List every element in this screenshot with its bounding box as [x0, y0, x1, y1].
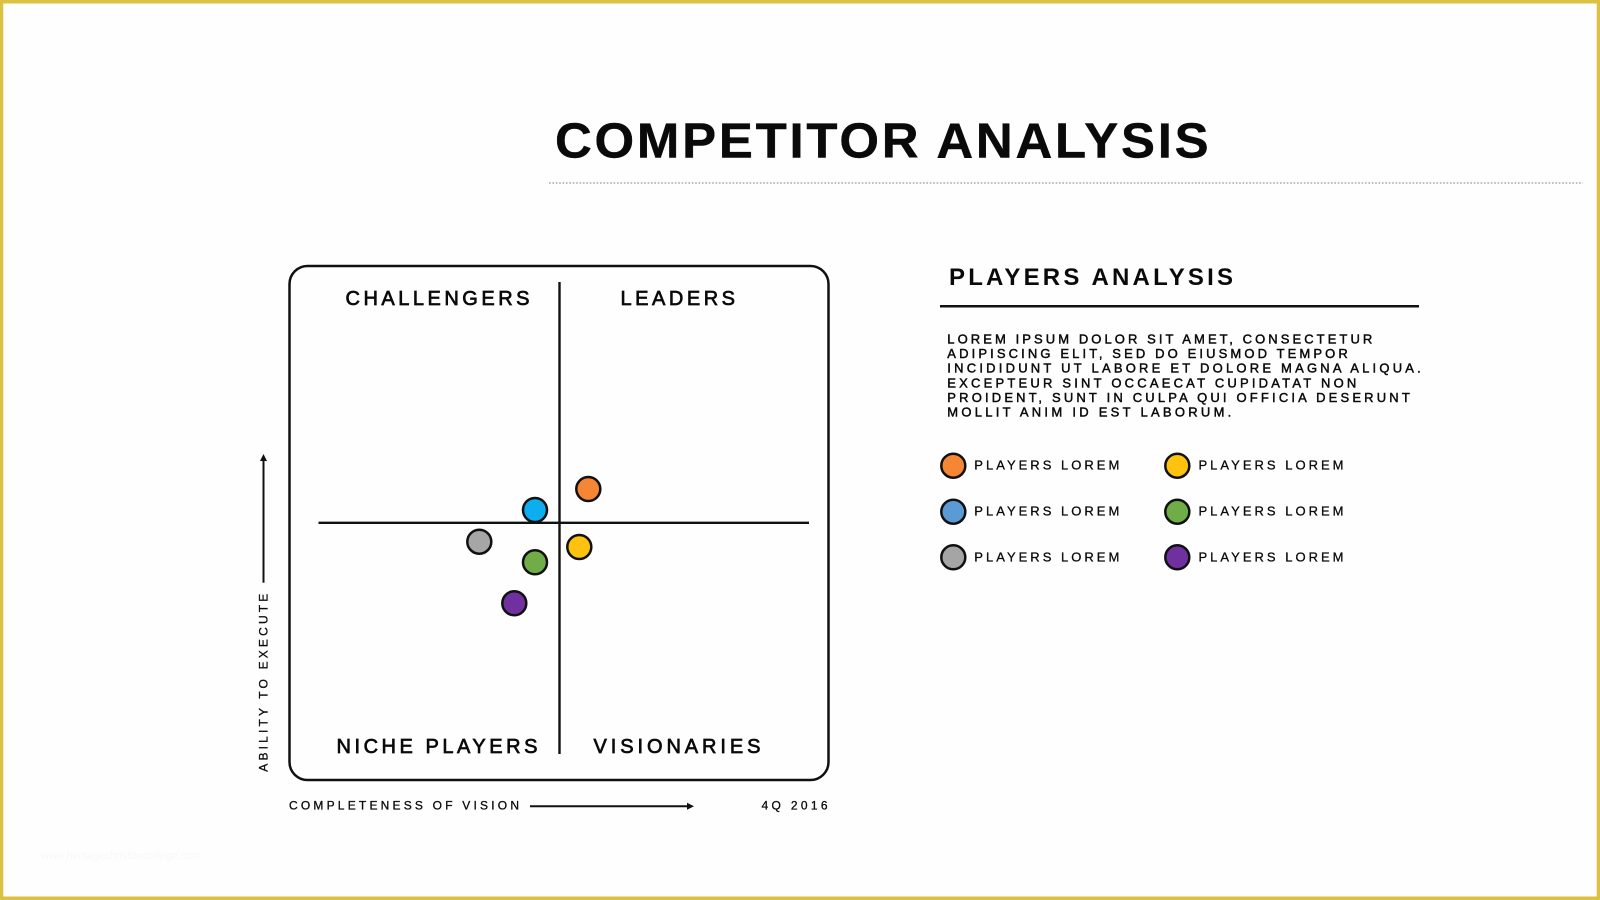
legend item: green: PLAYERS LOREM: [1198, 503, 1344, 518]
x axis label: COMPLETENESS OF VISION: [289, 798, 519, 812]
paragraph: LOREM IPSUM DOLOR SIT AMET, CONSECTETUR: [947, 331, 1372, 346]
paragraph: PROIDENT, SUNT IN CULPA QUI OFFICIA DESERUNT: [947, 390, 1410, 405]
legend item: blue: PLAYERS LOREM: [974, 503, 1119, 518]
paragraph: MOLLIT ANIM ID EST LABORUM.: [947, 405, 1231, 420]
legend: [941, 454, 1344, 569]
label: visionaries: VISIONARIES: [594, 736, 760, 758]
paragraph: [947, 331, 1421, 420]
legend item: yellow: [1165, 454, 1344, 478]
date label: 4Q 2016: [762, 798, 828, 812]
players analysis heading: PLAYERS ANALYSIS: [949, 264, 1233, 291]
quadrant axes: [318, 282, 809, 754]
legend item: orange: [941, 454, 1119, 478]
label: niche players: NICHE PLAYERS: [336, 736, 538, 758]
y axis arrow: [260, 454, 267, 583]
legend item: gray: PLAYERS LOREM: [974, 550, 1119, 565]
legend item: purple: [1165, 545, 1344, 569]
title: COMPETITOR ANALYSIS: [555, 113, 1209, 168]
label: challengers: CHALLENGERS: [346, 288, 530, 310]
paragraph: ADIPISCING ELIT, SED DO EIUSMOD TEMPOR: [947, 346, 1348, 361]
y axis label: ABILITY TO EXECUTE: [256, 594, 270, 772]
data points: [467, 477, 600, 615]
chart frame: [290, 266, 828, 780]
legend item: purple: PLAYERS LOREM: [1198, 550, 1344, 565]
legend item: orange: PLAYERS LOREM: [974, 457, 1119, 472]
legend item: gray: [941, 545, 1119, 569]
watermark: www.heritagechristiancollege.com: [40, 850, 201, 862]
x axis arrow: [530, 803, 694, 810]
legend item: green: [1165, 500, 1344, 524]
paragraph: EXCEPTEUR SINT OCCAECAT CUPIDATAT NON: [947, 375, 1356, 390]
paragraph: INCIDIDUNT UT LABORE ET DOLORE MAGNA ALIQUA.: [947, 361, 1421, 376]
quadrant chart: [290, 266, 828, 780]
label: leaders: LEADERS: [620, 288, 735, 310]
legend item: yellow: PLAYERS LOREM: [1198, 457, 1344, 472]
legend item: blue: [941, 500, 1119, 524]
